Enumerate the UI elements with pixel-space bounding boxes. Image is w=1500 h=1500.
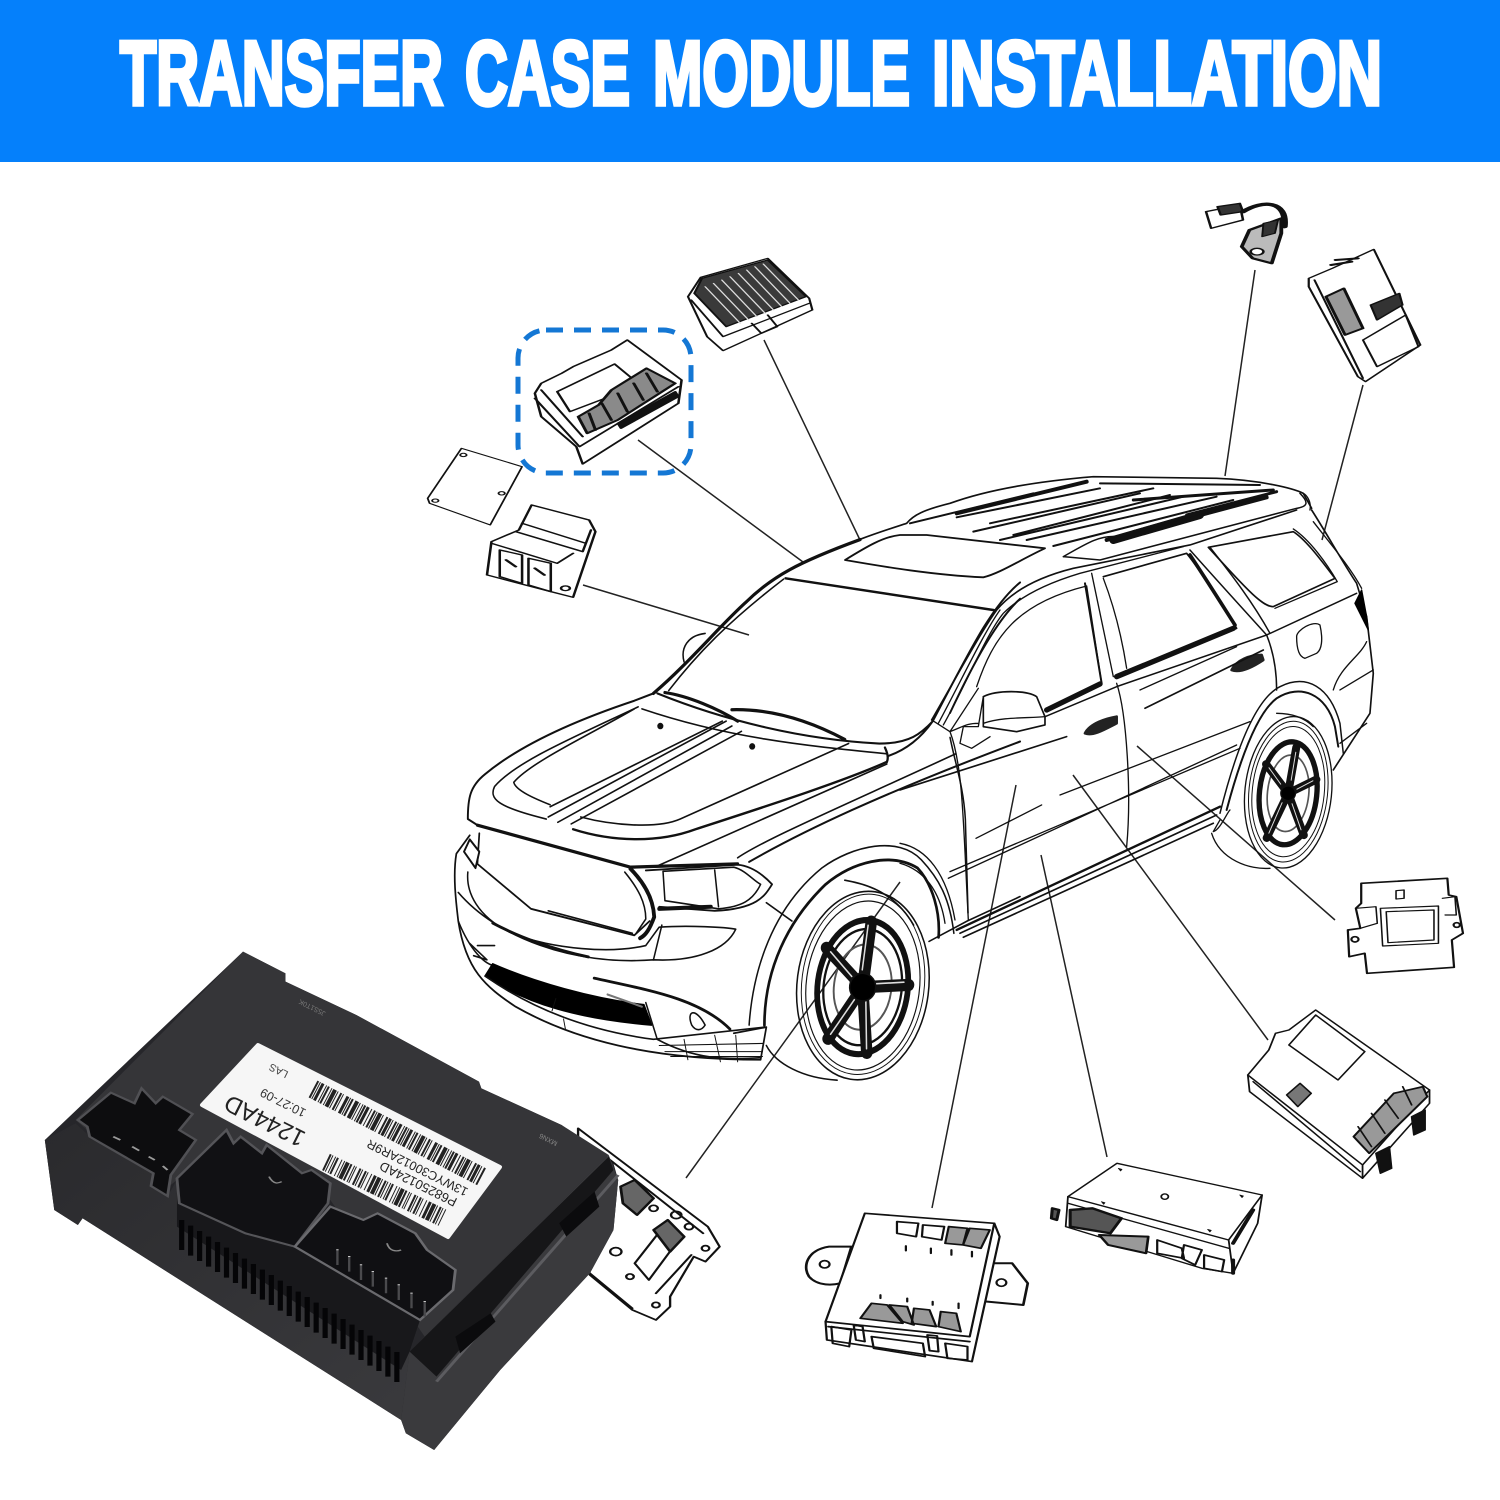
lower right modules bbox=[806, 878, 1463, 1362]
leader lines bbox=[583, 270, 1363, 1208]
icon: module right, lower bbox=[1248, 1010, 1430, 1178]
title: CASE bbox=[465, 24, 630, 124]
connector two bbox=[177, 1130, 330, 1247]
connector pins bbox=[337, 1250, 425, 1317]
module label: 13WYC30012AR9R bbox=[365, 1137, 470, 1199]
connector one bbox=[78, 1088, 196, 1196]
title: TRANSFER bbox=[120, 24, 443, 124]
module label bbox=[202, 1045, 500, 1237]
cooling fins bbox=[182, 1220, 397, 1382]
top modules bbox=[428, 203, 1420, 597]
module front face bbox=[45, 1123, 420, 1420]
car line drawing bbox=[455, 477, 1373, 1089]
front wheel bbox=[785, 882, 940, 1089]
title banner bbox=[0, 0, 1500, 162]
title bbox=[120, 24, 1382, 124]
title: MODULE bbox=[653, 24, 910, 124]
label text: 1244AD bbox=[220, 1089, 310, 1152]
connector three bbox=[295, 1207, 455, 1320]
module label: P68250124AD bbox=[377, 1158, 459, 1210]
car: sunroof, roof and rear section bbox=[845, 477, 1373, 937]
module label: 10:27-09 bbox=[258, 1085, 308, 1120]
module body bbox=[45, 952, 618, 1450]
product photo: transfer case module: MXN6 bbox=[538, 1131, 559, 1146]
selection highlight: dashed box around transfer case module bbox=[518, 330, 691, 473]
icon: finned heat sink module bbox=[688, 258, 812, 351]
module right side bbox=[401, 1155, 618, 1450]
icon: module with mounting ears bbox=[806, 1213, 1028, 1362]
icon: module right, upper bbox=[1348, 878, 1463, 973]
module label: LAS bbox=[267, 1060, 290, 1080]
icon: camera sensor with wire bbox=[1206, 203, 1285, 263]
icon: transfer case module diagram bbox=[535, 340, 682, 464]
product photo: transfer case module bbox=[45, 952, 618, 1450]
icon: airbag control module bbox=[487, 505, 595, 597]
moulded markings: J5S1T0K bbox=[298, 997, 327, 1016]
barcode upper bbox=[313, 1089, 482, 1177]
module recessed fin area bbox=[177, 1180, 420, 1370]
rear wheel bbox=[1237, 712, 1339, 872]
car: front section bbox=[455, 540, 1020, 1089]
module top face bbox=[76, 952, 609, 1337]
icon: circuit board module behind photo bbox=[578, 1128, 720, 1320]
icon: flat control module top right bbox=[1309, 249, 1420, 382]
barcode lower bbox=[326, 1162, 443, 1218]
icon: module centre bbox=[1051, 1163, 1262, 1273]
icon: cover plate bbox=[428, 448, 522, 525]
